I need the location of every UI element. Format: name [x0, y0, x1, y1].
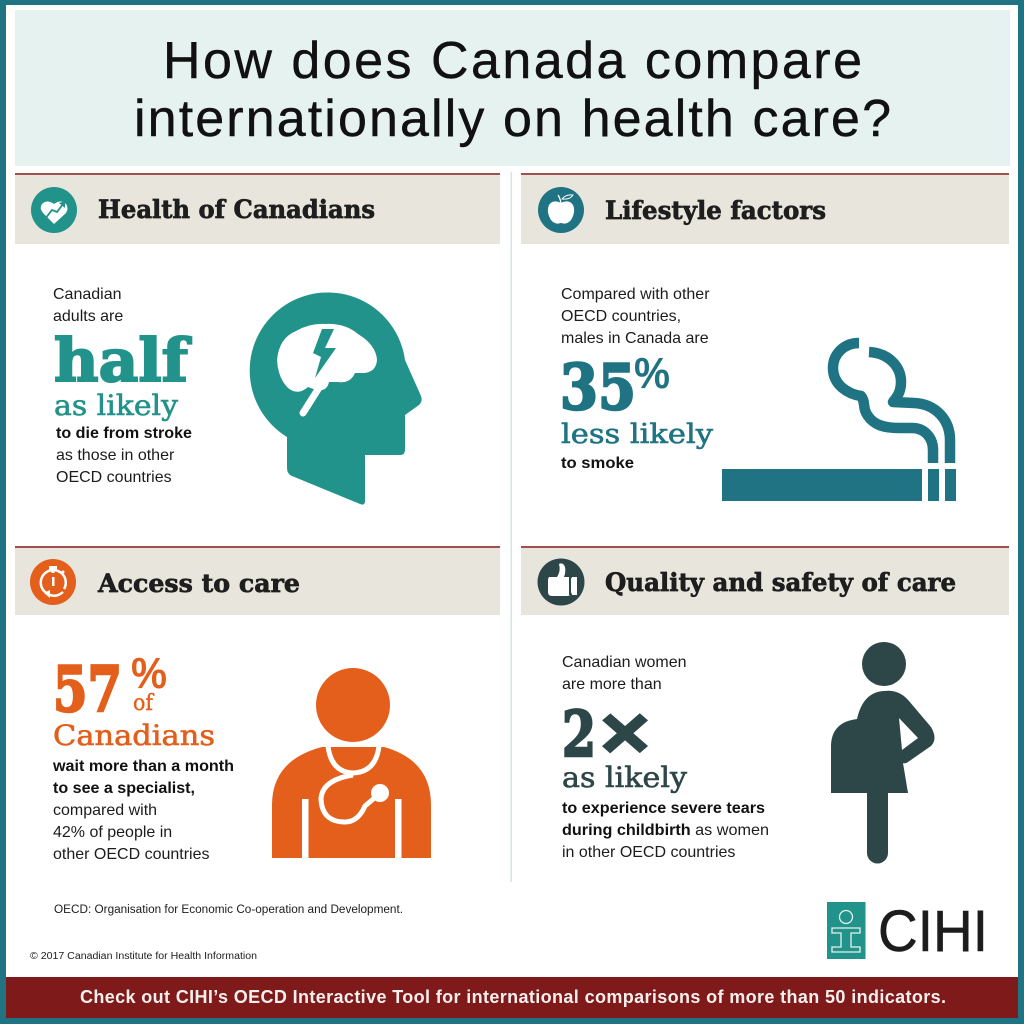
icon: doctor with stethoscope [272, 668, 431, 859]
section header: lifestyle factors [521, 173, 1009, 244]
stat text: half as likely: adults are [53, 308, 123, 325]
stat text: half as likely: half [54, 326, 192, 395]
copyright: © 2017 Canadian Institute for Health Information [30, 951, 257, 962]
stat text: 35% less likely [560, 286, 714, 472]
section header: access to care: Access to care [97, 569, 300, 598]
icon: cigarette with smoke [722, 343, 956, 501]
call-to-action banner: Check out CIHI’s OECD Interactive Tool for international comparisons of more than 50 indicators. [80, 987, 946, 1007]
footnote: OECD definition: OECD: Organisation for Economic Co-operation and Development. [54, 904, 403, 916]
stat text: 57% of Canadians: Canadians [53, 719, 215, 752]
title: internationally on health care? [134, 90, 891, 148]
stat text: 57% of Canadians: to see a specialist, [53, 780, 195, 797]
panel: quality and safety of care [521, 546, 1009, 864]
stat text: 57% of Canadians: 42% of people in [53, 824, 172, 841]
stat text: 35% less likely: males in Canada are [561, 330, 709, 347]
section header: quality and safety of care [521, 546, 1009, 615]
stat text: 2x as likely: during childbirth as women [562, 822, 769, 839]
title panel [15, 10, 1010, 166]
stat text: 2x as likely: 2 [562, 697, 596, 771]
stat text: 2x as likely: to experience severe tears [562, 800, 765, 817]
section header: lifestyle factors: Lifestyle factors [605, 196, 826, 225]
stat text: 57% of Canadians: of [133, 691, 155, 716]
stat text: 35% less likely: OECD countries, [561, 308, 681, 325]
stat text: 57% of Canadians: 57 [53, 652, 122, 726]
stat text: 35% less likely: 35 [560, 350, 636, 424]
stat text: 2x as likely [562, 654, 769, 861]
stat text: half as likely: to die from stroke [56, 425, 192, 442]
stat text: 35% less likely: to smoke [561, 455, 634, 472]
section header: health of Canadians: Health of Canadians [98, 195, 375, 224]
stat text: half as likely: as those in other [56, 447, 175, 464]
stat text: half as likely: Canadian [53, 286, 122, 303]
stat text: 57% of Canadians: other OECD countries [53, 846, 210, 863]
stat text: 2x as likely: × [600, 691, 650, 774]
stat text: 2x as likely: in other OECD countries [562, 844, 735, 861]
stat text: half as likely: OECD countries [56, 469, 172, 486]
logo: CIHI: CIHI [878, 899, 988, 964]
logo: CIHI [827, 899, 988, 964]
stat text: 57% of Canadians: % [131, 649, 167, 698]
stat text: half as likely: as likely [54, 389, 178, 422]
section header: health of Canadians [15, 173, 500, 244]
stat text: 2x as likely: Canadian women [562, 654, 687, 671]
panel: access to care [15, 546, 500, 863]
stat text: 35% less likely: % [634, 349, 670, 398]
stat text: 35% less likely: Compared with other [561, 286, 710, 303]
stat text: 57% of Canadians [52, 649, 234, 863]
stat text: 2x as likely: are more than [562, 676, 662, 693]
call-to-action banner [6, 977, 1018, 1018]
icon: head with brain and lightning bolt [250, 292, 422, 505]
title [134, 32, 891, 148]
section header: access to care [15, 546, 500, 615]
icon: pregnant woman [831, 642, 934, 864]
panel: lifestyle factors [521, 173, 1009, 501]
stat text: 57% of Canadians: compared with [53, 802, 157, 819]
title: How does Canada compare [163, 32, 862, 90]
stat text: 2x as likely: as likely [562, 761, 687, 794]
panel: health of Canadians [15, 173, 500, 505]
section header: quality and safety of care: Quality and safety of care [605, 568, 956, 597]
stat text: 57% of Canadians: wait more than a month [52, 758, 234, 775]
stat text: half as likely [53, 286, 192, 486]
stat text: 35% less likely: less likely [561, 419, 714, 450]
